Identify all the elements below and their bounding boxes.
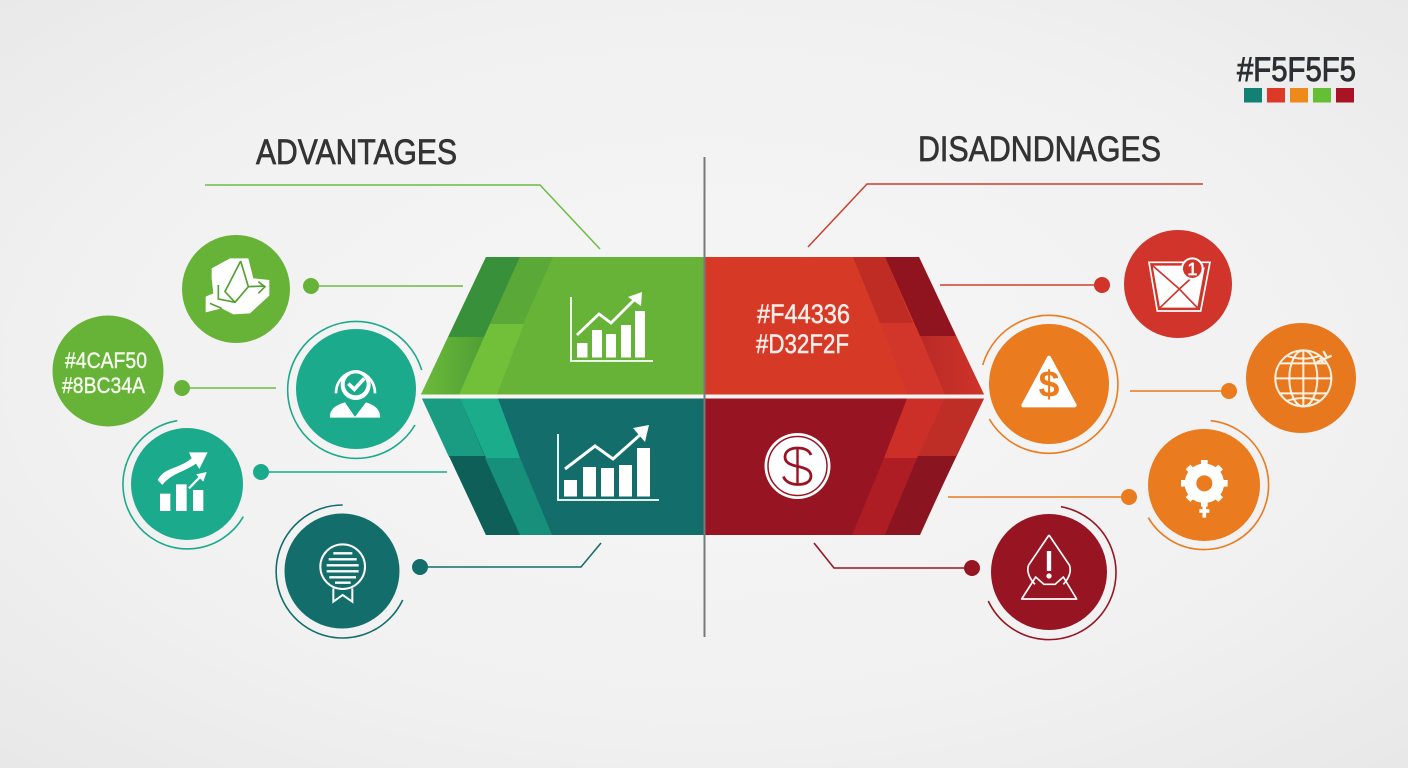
divider between panels [421, 394, 984, 398]
icon: gear [1181, 460, 1228, 518]
icon: green growth chart [571, 292, 653, 361]
item: left 2 colour codes [52, 316, 276, 426]
icon: badge [320, 544, 365, 602]
icon: envelope notification: 1 [1187, 259, 1197, 279]
item: right 1 mail [940, 230, 1232, 338]
item: left 3 person check [288, 321, 422, 458]
item: right 2 dollar warning [983, 315, 1118, 453]
item: left 5 certificate [276, 505, 601, 638]
panel: bottom right dark red [705, 398, 984, 535]
heading: advantages: ADVANTAGES [256, 133, 457, 172]
colour legend: #F5F5F5 [1237, 51, 1356, 89]
item: right 4 gear [948, 421, 1269, 550]
icon: dollar coin [764, 433, 830, 499]
leader line: disadvantages heading [808, 184, 1203, 247]
icon: bars and arrows [158, 452, 208, 511]
item: left 1 [182, 235, 463, 343]
panel: bottom left teal [422, 398, 704, 535]
colour codes: red: #F44336 [757, 299, 850, 329]
colour codes: green: #8BC34A [62, 373, 145, 398]
item: left 4 growth arrows [123, 421, 447, 549]
colour codes: green: #4CAF50 [65, 348, 147, 373]
heading: disadvantages: DISADNDNAGES [918, 130, 1161, 169]
leader line: advantages heading [205, 185, 600, 249]
colour codes: red: #D32F2F [756, 329, 849, 359]
item: right 5 alert [814, 507, 1116, 640]
panel: top right red [705, 257, 984, 394]
icon: globe with plane [1275, 350, 1332, 406]
icon: envelope notification [1149, 258, 1210, 311]
colour codes: green [62, 348, 147, 398]
icon: person with check [330, 370, 380, 418]
icon: dollar triangle: $ [1039, 363, 1060, 405]
centre axis [704, 157, 706, 637]
item: right 3 globe [1130, 323, 1356, 433]
icon: teal growth chart [558, 425, 659, 500]
icon: abstract arrows shape [206, 258, 269, 314]
colour legend [1237, 51, 1356, 102]
panel: top left green [421, 257, 704, 394]
colour codes: red [756, 299, 850, 359]
icon: warning shape [1022, 535, 1077, 599]
